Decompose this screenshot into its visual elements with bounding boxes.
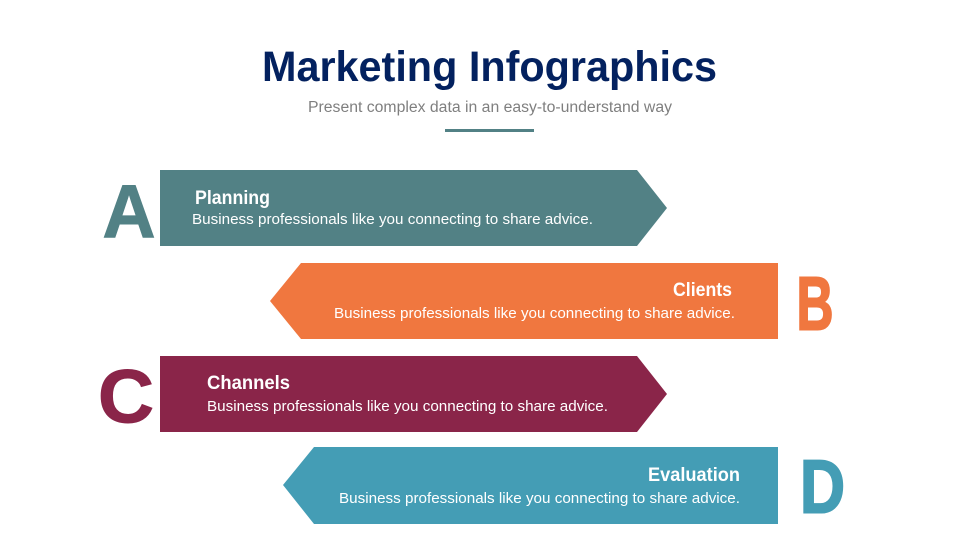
text: clients description: Business professionals like you connecting to share advice. (334, 305, 735, 322)
text: planning description: Business professionals like you connecting to share advice. (192, 211, 593, 228)
arrow: channels (160, 356, 667, 432)
letter B: B (796, 262, 834, 346)
subtitle: Present complex data in an easy-to-understand way (308, 99, 672, 116)
arrow: planning (160, 170, 667, 246)
letter D: D (800, 444, 845, 528)
heading: clients: Clients (673, 280, 732, 301)
arrow: clients (270, 263, 778, 339)
title: Marketing Infographics (262, 43, 717, 91)
letter A: A (102, 169, 156, 253)
arrow: evaluation (283, 447, 778, 524)
heading: channels: Channels (207, 373, 290, 394)
panel: clients (270, 263, 778, 339)
panel: channels (160, 356, 667, 432)
title underline (445, 129, 534, 132)
text: evaluation description: Business professionals like you connecting to share advice. (339, 490, 740, 507)
panel: planning (160, 170, 667, 246)
letter C: C (98, 354, 154, 438)
heading: planning: Planning (195, 188, 270, 209)
text: channels description: Business professionals like you connecting to share advice. (207, 398, 608, 415)
heading: evaluation: Evaluation (648, 465, 740, 486)
panel: evaluation (283, 447, 778, 524)
